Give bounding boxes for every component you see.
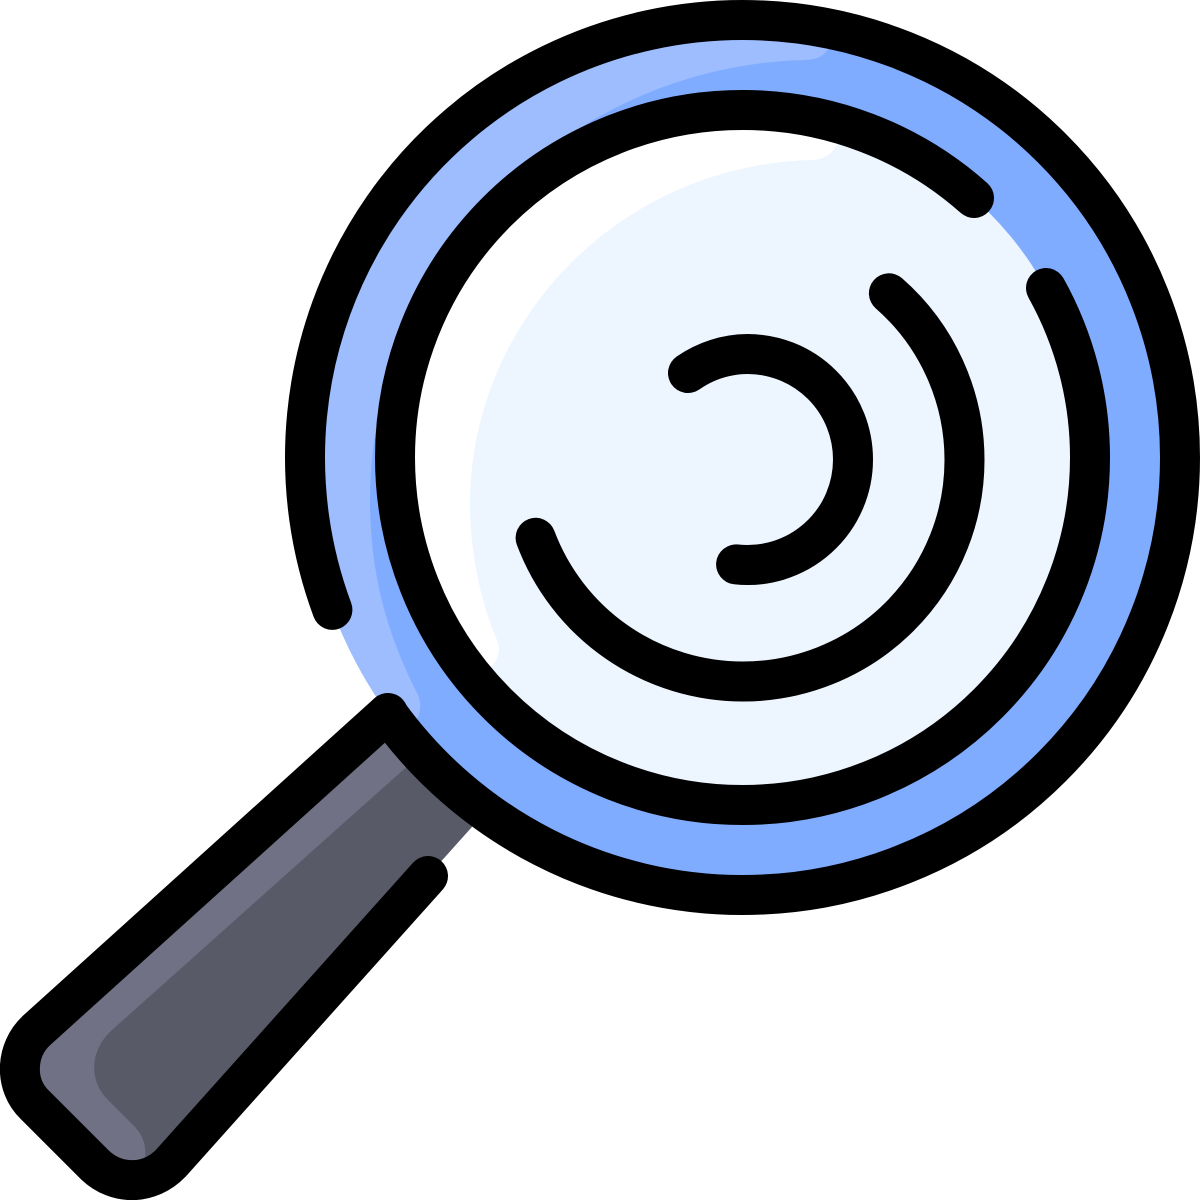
glass white reflection <box>415 130 837 667</box>
middle swirl arc <box>536 293 964 682</box>
handle highlight <box>20 713 412 1179</box>
glass fill <box>415 130 1070 785</box>
inner ring outline <box>395 110 1090 805</box>
inner swirl arc <box>688 354 853 565</box>
handle outline <box>20 713 428 1180</box>
outer ring outline <box>305 20 1180 895</box>
lens ring fill <box>325 40 1160 875</box>
handle fill <box>20 713 480 1180</box>
lens ring highlight <box>325 40 828 719</box>
